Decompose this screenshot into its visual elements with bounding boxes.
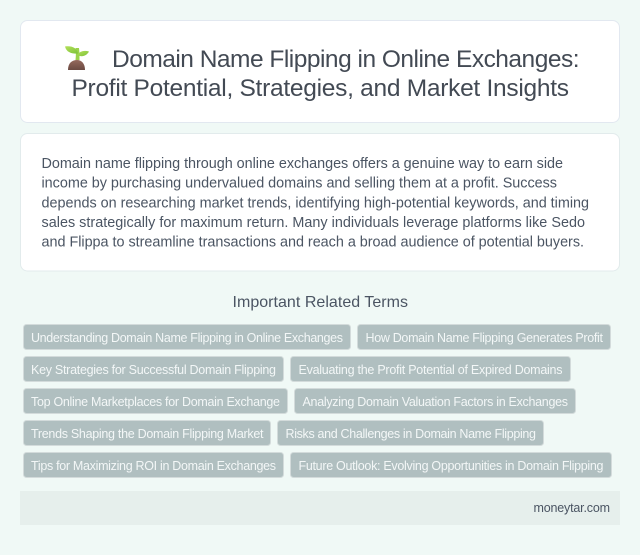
panel: intro paragraph — [20, 134, 620, 271]
tag: Evaluating the Profit Potential of Expired Domains — [298, 363, 562, 377]
tag — [24, 388, 288, 414]
tag — [358, 324, 610, 350]
text block: intro — [42, 156, 589, 250]
footer bar — [20, 491, 620, 525]
tag: Trends Shaping the Domain Flipping Market — [31, 427, 264, 441]
tag — [278, 420, 544, 446]
heading: related terms: Important Related Terms — [232, 294, 408, 311]
tag — [24, 356, 284, 382]
text block: intro: Domain name flipping through online exchanges offers a genuine way to earn side — [42, 156, 563, 172]
title: Profit Potential, Strategies, and Market Insights — [72, 75, 569, 102]
tag: Understanding Domain Name Flipping in Online Exchanges — [31, 331, 343, 345]
tag: Key Strategies for Successful Domain Flipping — [31, 363, 276, 377]
text block: intro: income by purchasing undervalued domains and selling them at a profit. Success — [42, 176, 557, 192]
tag: Top Online Marketplaces for Domain Exchange — [31, 395, 280, 409]
tag: Tips for Maximizing ROI in Domain Exchanges — [31, 459, 276, 473]
footer source text: moneytar.com — [534, 501, 610, 515]
text block: intro: sales strategically for maximum return. Many individuals leverage platforms like Sedo — [42, 215, 585, 231]
tag: Future Outlook: Evolving Opportunities in Domain Flipping — [298, 459, 604, 473]
tag — [294, 388, 576, 414]
tag: Analyzing Domain Valuation Factors in Exchanges — [302, 395, 568, 409]
title — [72, 46, 580, 102]
title: Domain Name Flipping in Online Exchanges: — [112, 46, 580, 73]
tag: Risks and Challenges in Domain Name Flipping — [286, 427, 536, 441]
tag: How Domain Name Flipping Generates Profit — [366, 331, 604, 345]
tag — [290, 452, 612, 478]
icon: sprout — [65, 46, 89, 70]
tag — [24, 452, 284, 478]
tag — [24, 420, 270, 446]
tag — [290, 356, 570, 382]
header card — [20, 20, 620, 122]
tag — [24, 324, 350, 350]
text block: intro: and Flippa to streamline transactions and reach a broad audience of potential buyers. — [42, 234, 584, 250]
tag list — [24, 324, 612, 478]
text block: intro: depends on researching market trends, identifying high-potential keywords, and timing — [42, 196, 589, 212]
